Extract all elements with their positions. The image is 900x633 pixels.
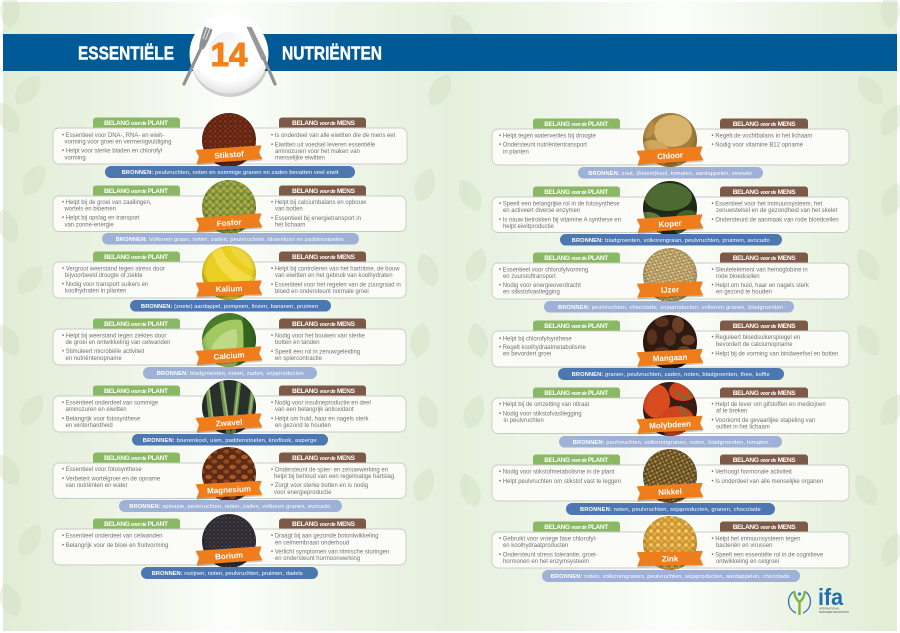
tab: belang voor de mens: [279, 252, 366, 262]
text box: bijvoorbeeld droogte of ziekte: [65, 273, 143, 279]
text box: de groei en ontwikkeling van celwanden: [66, 340, 170, 346]
text box: van eiwitten en het gebruik van koolhydraten: [275, 273, 393, 279]
text box: helpt eiwitproductie: [503, 224, 555, 230]
ribbon: [196, 280, 262, 298]
text box: [492, 532, 849, 568]
text box: • Nodig voor het bouwen van sterke: [271, 334, 366, 340]
text box: [492, 398, 849, 434]
sources pill: [132, 434, 328, 446]
text box: van zonne-energie: [64, 222, 114, 228]
sources pill: [119, 500, 342, 512]
sources pill: BRONNEN: bladgroenten, volkorengraan, peulvruchten, pruimen, avocado: [572, 238, 770, 244]
tab: belang voor de mens: [279, 518, 366, 529]
tab: belang voor de plant: [533, 118, 620, 129]
nutrient: Chloor: [492, 113, 849, 178]
nutrient: Mangaan: [492, 315, 849, 380]
sources pill: BRONNEN: peulvruchten, volkorengranen, noten, bladgroenten, tomaten: [573, 440, 768, 446]
text box: menselijke eiwitten: [275, 156, 325, 162]
text box: bacteriën en virussen: [716, 543, 772, 549]
text box: • Essentieel onderdeel van sommige: [62, 400, 159, 406]
text box: [492, 263, 849, 299]
nutrient: Kalium: [53, 243, 406, 312]
tab: belang voor de mens: BELANG voor de MENS: [292, 188, 356, 195]
text box: • Is onderdeel van alle menselijke organen: [712, 479, 823, 485]
ribbon: Koper: [658, 219, 682, 229]
text box: • Helpt bij chlorofylsynthese: [499, 336, 572, 342]
tab: belang voor de mens: [279, 386, 366, 396]
ribbon: Zink: [662, 554, 679, 564]
nutrient: Koper: [492, 181, 849, 246]
text box: • Helpt tegen waterverlies bij droogte: [499, 134, 596, 140]
ribbon: Molybdeen: [649, 419, 691, 431]
tab: belang voor de mens: BELANG voor de MENS: [733, 390, 796, 397]
sources pill: [130, 300, 331, 312]
ribbon: [637, 416, 703, 435]
text box: vorming voor groei en vermenigvuldiging: [64, 140, 171, 146]
text box: in peulvruchten: [504, 418, 544, 424]
text box: af te breken: [716, 408, 747, 414]
tab: belang voor de plant: BELANG voor de PLANT: [104, 455, 168, 462]
tab: belang voor de plant: BELANG voor de PLANT: [544, 457, 608, 464]
tab: belang voor de mens: [720, 118, 808, 129]
ribbon: [196, 481, 262, 500]
tab: belang voor de mens: [279, 118, 366, 128]
ribbon: [196, 413, 263, 433]
ribbon: [196, 346, 263, 366]
tab: belang voor de plant: [533, 388, 620, 398]
ribbon: Zwavel: [215, 418, 243, 428]
icon: food photo: [202, 246, 256, 300]
title: nutriënten: NUTRIËNTEN: [282, 44, 382, 64]
sources pill: [559, 436, 782, 448]
text box: van botten: [275, 207, 303, 213]
text box: ontwikkeling en celgroei: [716, 559, 779, 565]
text box: • Is onderdeel van alle eiwitten die de mens eet: [271, 133, 396, 139]
tab: belang voor de mens: [720, 252, 808, 263]
text box: • Helpt bij de vorming van bindweefsel en botten: [712, 351, 838, 357]
tab: belang voor de plant: [533, 522, 620, 532]
icon: food photo: [202, 514, 256, 568]
text box: aminozuren voor het maken van: [275, 149, 360, 155]
tab: belang voor de plant: BELANG voor de PLANT: [104, 254, 168, 261]
ribbon: [196, 213, 263, 233]
text box: • Essentieel voor DNA-, RNA- en eiwit-: [62, 133, 164, 139]
text box: zenuwstelsel en de gezondheid van het skelet: [716, 208, 837, 214]
icon: food photo: [643, 181, 697, 234]
text box: • Essentieel bij energietransport in: [271, 216, 361, 222]
nutrient: Zink: [492, 516, 849, 582]
text box: • Helpt bij de groei van zaailingen,: [62, 200, 152, 206]
text box: • Speelt een essentiële rol in de cognitieve: [712, 552, 824, 558]
ribbon: [637, 483, 703, 502]
ribbon: [637, 349, 703, 368]
text box: • Is nauw betrokken bij vitamine A synthese en: [499, 218, 621, 224]
icon: plate with number 14: [184, 14, 275, 97]
ribbon: Mangaan: [653, 353, 688, 363]
text box: [492, 331, 849, 367]
text box: bevordert de calciumopname: [716, 342, 793, 348]
text box: • Speelt een belangrijke rol in de fotosynthese: [499, 202, 620, 208]
tab: belang voor de mens: [720, 320, 808, 331]
tab: belang voor de mens: BELANG voor de MENS: [733, 524, 796, 531]
sources pill: BRONNEN: rozijnen, noten, peulvruchten, pruimen, dadels: [152, 571, 303, 577]
text box: en bevordert groei: [503, 352, 551, 358]
text box: van nutriënten en water: [66, 483, 128, 489]
text box: • Essentieel voor fotosynthese: [62, 467, 142, 473]
ribbon: Nikkel: [658, 487, 682, 497]
tab: belang voor de mens: BELANG voor de MENS: [292, 388, 356, 395]
text box: en ondersteunt hormoonwerking: [275, 556, 360, 562]
text box: • Helpt om huid, haar en nagels sterk: [271, 416, 368, 422]
tab: belang voor de plant: BELANG voor de PLANT: [104, 321, 168, 328]
tab: belang voor de mens: BELANG voor de MENS: [292, 455, 356, 462]
tab: belang voor de mens: BELANG voor de MENS: [292, 254, 356, 261]
text box: • Nodig voor insulineproductie en deel: [271, 400, 371, 406]
icon: food photo: [202, 379, 256, 437]
ribbon: Calcium: [213, 350, 245, 362]
text box: • Verlicht symptomen van ritmische storingen: [271, 550, 389, 556]
text box: en activeert diverse enzymen: [503, 208, 580, 214]
tab: belang voor de mens: BELANG voor de MENS: [733, 255, 796, 262]
text box: • Helpt bij calciumbalans en opbouw: [271, 200, 367, 206]
nutrient: Magnesium: [53, 447, 406, 512]
tab: belang voor de plant: [93, 386, 180, 396]
icon: food photo: [643, 449, 697, 503]
ribbon: Borium: [215, 551, 243, 561]
text box: • Essentieel voor het regelen van de zuurgraad in: [271, 282, 401, 288]
tab: belang voor de plant: [533, 186, 620, 197]
sources pill: [566, 503, 775, 515]
text box: bloed en ondersteunt normale groei: [275, 289, 369, 295]
text box: • Belangrijk voor de bloei en fruitvorming: [62, 543, 168, 549]
sources pill: [542, 570, 800, 582]
text box: [53, 529, 406, 565]
text box: vorming: [64, 156, 86, 162]
text box: botten en tanden: [275, 340, 320, 346]
tab: belang voor de mens: BELANG voor de MENS: [292, 321, 356, 328]
text box: • Ondersteunt de spier- en zenuwwerking en: [271, 468, 388, 474]
tab: belang voor de mens: BELANG voor de MENS: [733, 189, 796, 196]
text box: hormonen en het enzymsysteem: [503, 559, 589, 565]
text box: • Helpt bij weerstand tegen ziektes door: [62, 334, 166, 340]
text box: • Ondersteunt de aanmaak van rode bloedcellen: [712, 218, 839, 224]
ribbon: [637, 281, 703, 299]
icon: food photo: [643, 248, 697, 302]
text box: helpt bij behoud van een regelmatige hartslag: [274, 474, 394, 480]
ribbon: Chloor: [657, 151, 683, 161]
icon: food photo: [643, 113, 697, 167]
sources pill: [105, 166, 355, 178]
sources pill: [143, 367, 317, 379]
tab: belang voor de plant: [93, 252, 180, 262]
tab: belang voor de plant: BELANG voor de PLANT: [544, 390, 608, 397]
text box: en koolhydraatproducten: [503, 543, 568, 549]
tab: belang voor de mens: [720, 186, 808, 197]
header banner: [3, 34, 897, 71]
text box: [492, 129, 849, 165]
ribbon: IJzer: [661, 285, 679, 295]
text box: • Gebruikt voor vroege fase chlorofyl-: [499, 536, 597, 542]
sources pill: BRONNEN: spinazie, peulvruchten, noten, zaden, volkoren granen, avocado: [129, 504, 330, 510]
text box: • Verbetert wortelgroei en de opname: [62, 476, 161, 482]
tab: belang voor de mens: BELANG voor de MENS: [733, 121, 796, 128]
sources pill: BRONNEN: granen, peulvruchten, zaden, noten, bladgroenten, thee, koffie: [572, 372, 770, 378]
text box: • Ondersteunt stress tolerantie, groei-: [499, 552, 597, 558]
nutrient: Molybdeen: [492, 381, 849, 448]
text box: • Verhoogt hormonale activiteit: [712, 470, 792, 476]
text box: [53, 463, 406, 498]
text box: • Belangrijk voor fotosynthese: [62, 416, 141, 422]
text box: [492, 197, 849, 232]
text box: • Eiwitten uit voedsel leveren essentiële: [271, 142, 376, 148]
text box: [53, 396, 406, 432]
icon: plate with number 14: 14: [211, 36, 248, 73]
text box: • Helpt bij controleren van het hartritme, de bouw: [271, 266, 400, 272]
text box: • Nodig voor stikstofvastlegging: [499, 412, 582, 418]
text box: en nutriëntenopname: [66, 356, 122, 362]
sources pill: BRONNEN: Volkoren graan, noten, zaden, peulvruchten, bloemkool en paddenstoelen: [116, 237, 344, 243]
icon: food photo: [202, 113, 256, 167]
tab: belang voor de mens: [720, 454, 808, 465]
nutrient: Borium: [53, 514, 406, 579]
sources pill: [578, 167, 763, 178]
text box: en winterhardheid: [66, 423, 113, 429]
text box: koolhydraten in planten: [65, 289, 126, 295]
text box: • Helpt om huid, haar en nagels sterk: [712, 283, 809, 289]
logo: IFA: ifa: [818, 584, 843, 610]
tab: belang voor de plant: [93, 186, 180, 196]
text box: en zuurstoftransport: [503, 274, 556, 280]
tab: belang voor de plant: BELANG voor de PLANT: [544, 189, 608, 196]
text box: • Voorkomt de gevaarlijke stapeling van: [712, 418, 815, 424]
text box: en stikstofvastlegging: [503, 290, 560, 296]
tab: belang voor de plant: BELANG voor de PLANT: [544, 323, 608, 330]
text box: • Nodig voor energieoverdracht: [499, 283, 581, 289]
tab: belang voor de plant: [93, 118, 180, 128]
tab: belang voor de plant: [533, 454, 620, 465]
ribbon: Magnesium: [207, 484, 251, 496]
tab: belang voor de mens: [279, 452, 366, 463]
logo: IFA: FERTILIZER ASSOCIATION: [819, 610, 849, 614]
text box: • Reguleert bloedsuikerspiegel en: [712, 335, 800, 341]
text box: • Nodig voor transport suikers en: [62, 282, 148, 288]
tab: belang voor de plant: BELANG voor de PLANT: [104, 521, 168, 528]
sources pill: BRONNEN: peulvruchten, noten en sommige granen en zaden bevatten veel eiwit: [122, 170, 339, 176]
text box: • Nodig voor stikstofmetabolisme in de plant: [499, 470, 615, 476]
text box: • Vergroot weerstand tegen stress door: [62, 266, 165, 272]
tab: belang voor de mens: [720, 522, 808, 532]
tab: belang voor de mens: [279, 186, 366, 196]
tab: belang voor de plant: [93, 452, 180, 463]
tab: belang voor de plant: BELANG voor de PLANT: [544, 524, 608, 531]
text box: rode bloedcellen: [716, 274, 760, 280]
text box: aminozuren en eiwitten: [66, 407, 127, 413]
nutrient: Calcium: [53, 313, 406, 379]
ribbon: Kalium: [216, 284, 243, 294]
logo: IFA: INTERNATIONAL: [819, 606, 840, 610]
ribbon: [637, 551, 703, 568]
tab: belang voor de plant: BELANG voor de PLANT: [104, 120, 168, 127]
tab: belang voor de plant: [533, 252, 620, 263]
logo: IFA: [789, 584, 849, 615]
text box: • Helpt de lever om gifstoffen en medicijnen: [712, 402, 826, 408]
sources pill: BRONNEN: noten, peulvruchten, sojaproducten, granen, chocolade: [580, 507, 761, 513]
icon: food photo: [643, 315, 697, 369]
text box: • Helpt bij de omzetting van nitraat: [499, 402, 590, 408]
text box: en gezond te houden: [275, 423, 331, 429]
tab: belang voor de plant: BELANG voor de PLANT: [544, 121, 608, 128]
tab: belang voor de mens: BELANG voor de MENS: [733, 457, 796, 464]
text box: • Helpt voor sterke bladen en chlorofyl: [62, 149, 162, 155]
sources pill: [544, 301, 794, 312]
sources pill: [560, 234, 782, 246]
tab: belang voor de plant: [93, 518, 180, 529]
nutrient: Fosfor: [53, 180, 406, 244]
tab: belang voor de mens: BELANG voor de MENS: [292, 521, 356, 528]
text box: en spiercontractie: [275, 356, 323, 362]
nutrient: Zwavel: [53, 379, 406, 446]
nutrient: IJzer: [492, 248, 849, 312]
ribbon: [637, 214, 704, 234]
icon: food photo: [202, 180, 256, 234]
tab: belang voor de plant: [93, 318, 180, 329]
tab: belang voor de plant: [533, 320, 620, 331]
tab: belang voor de plant: BELANG voor de PLANT: [104, 188, 168, 195]
tab: belang voor de mens: [720, 388, 808, 398]
text box: • Regelt koolhydraatmetabolisme: [499, 345, 587, 351]
tab: belang voor de mens: BELANG voor de MENS: [292, 120, 356, 127]
sources pill: BRONNEN: peulvruchten, chocolade, sojaproducten, volkoren granen, bladgroenten: [558, 305, 783, 311]
tab: belang voor de plant: BELANG voor de PLANT: [544, 255, 608, 262]
text box: • Essentieel onderdeel van celwanden: [62, 534, 162, 540]
text box: van een belangrijk antioxidant: [275, 407, 354, 413]
icon: food photo: [643, 516, 697, 570]
text box: [53, 262, 406, 298]
text box: in planten: [503, 150, 529, 156]
text box: • Essentieel voor chlorofylvorming: [499, 268, 588, 274]
ribbon: [196, 546, 263, 566]
text box: • Sleutelelement van hemoglobine in: [712, 268, 808, 274]
sources pill: [102, 233, 359, 244]
tab: belang voor de plant: BELANG voor de PLANT: [104, 388, 168, 395]
text box: voor energieproductie: [274, 490, 332, 496]
ribbon: [196, 145, 263, 165]
sources pill: BRONNEN: bladgroenten, noten, zaden, sojaproducten: [157, 371, 304, 377]
sources pill: [558, 368, 784, 380]
nutrient: Nikkel: [492, 449, 849, 515]
text box: sulfiet in het lichaam: [716, 424, 770, 430]
sources pill: BRONNEN: boerenkool, uien, paddenstoelen, knoflook, asperge: [143, 438, 317, 444]
ribbon: Fosfor: [216, 218, 242, 228]
text box: • Helpt peulvruchten om stikstof vast te leggen: [499, 479, 621, 485]
tab: belang voor de mens: [279, 318, 366, 329]
text box: [53, 128, 407, 164]
text box: • Ondersteunt nutriëntentransport: [499, 142, 587, 148]
sources pill: BRONNEN: noten, volkorengranen, peulvruchten, sojaproducten, aardappelen, chocolade: [551, 574, 790, 580]
title: essentiële: ESSENTIËLE: [78, 44, 174, 64]
text box: en gezond te houden: [716, 290, 772, 296]
nutrient: Stikstof: [53, 113, 407, 178]
text box: • Helpt bij opslag en transport: [62, 216, 140, 222]
sources pill: [141, 567, 318, 579]
text box: • Stimuleert microbiële activiteit: [62, 349, 145, 355]
icon: food photo: [642, 381, 697, 438]
ribbon: [637, 146, 704, 166]
text box: en celmembraan onderhoud: [275, 540, 349, 546]
sources pill: BRONNEN: zout, (bloem)kool, tomaten, aardappelen, zeewier: [588, 171, 752, 177]
tab: belang voor de mens: BELANG voor de MENS: [733, 323, 796, 330]
text box: • Helpt het immuunsysteem tegen: [712, 536, 800, 542]
text box: wortels en bloemen: [64, 207, 116, 213]
ribbon: Stikstof: [214, 149, 244, 161]
text box: [53, 196, 406, 232]
text box: [492, 465, 849, 501]
text box: • Draagt bij aan gezonde botontwikkeling: [271, 534, 378, 540]
text box: • Speelt een rol in zenuwgeleiding: [271, 350, 360, 356]
icon: food photo: [202, 447, 256, 501]
text box: het lichaam: [275, 223, 305, 229]
sources pill: BRONNEN: (zoete) aardappel, pompoen, linzen, bananen, pruimen: [141, 304, 318, 310]
text box: • Regelt de vochtbalans in het lichaam: [712, 134, 812, 140]
text box: [53, 329, 406, 365]
text box: • Essentieel voor het immuunsysteem, het: [712, 202, 823, 208]
icon: food photo: [202, 313, 256, 367]
text box: • Zorgt voor sterke botten en is nodig: [271, 483, 368, 489]
text box: • Nodig voor vitamine B12 opname: [712, 142, 804, 148]
